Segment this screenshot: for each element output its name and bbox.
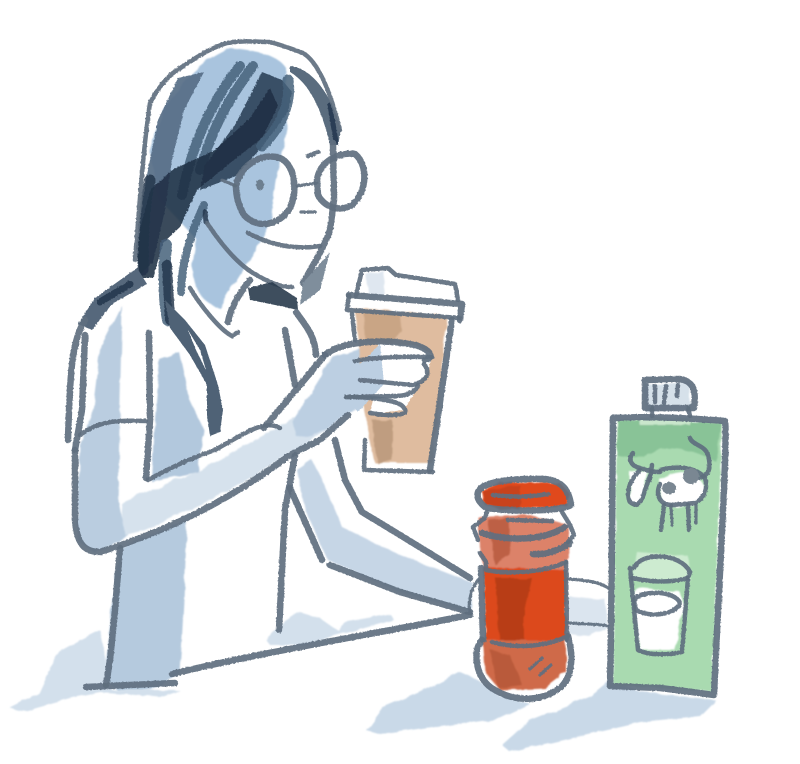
- smile: [248, 233, 320, 247]
- collar and bow tie: [190, 252, 330, 355]
- jar paint: [478, 482, 570, 690]
- hair dark mass: [136, 88, 278, 278]
- shoulder hair: [78, 268, 147, 330]
- jaw: [207, 223, 292, 287]
- jar: [473, 479, 574, 699]
- under arm torso wash: [152, 353, 204, 482]
- body washes: [77, 306, 473, 690]
- cup outline: [347, 268, 462, 472]
- sheep lines: [630, 453, 660, 472]
- jar outline: [473, 479, 574, 699]
- carton outline: [610, 379, 726, 695]
- hair strokes: [78, 66, 341, 436]
- coffee cup: [325, 268, 462, 472]
- lower lock: [165, 300, 223, 436]
- glass lines: [632, 556, 690, 581]
- hair and face wash: [150, 48, 287, 308]
- shirt and arm outlines: [68, 320, 470, 687]
- eye and nose: [256, 180, 264, 190]
- far arm wash: [297, 460, 473, 612]
- ground shadows: [10, 596, 716, 752]
- sheep body: [630, 470, 705, 507]
- hand wash: [293, 342, 384, 437]
- lower torso wash: [105, 520, 187, 690]
- far hand and arm behind jar: [469, 579, 608, 626]
- milk carton: [610, 379, 726, 695]
- milk glass: [633, 588, 684, 650]
- glasses bridge and temple: [297, 183, 317, 186]
- head outline and face: [135, 41, 364, 287]
- sleeve wash: [77, 306, 128, 553]
- hand with fingers over cup: [325, 342, 432, 415]
- arm wash: [120, 410, 350, 535]
- glasses right lens: [317, 154, 364, 208]
- carton paint: [613, 382, 722, 692]
- cup coffee fill: [353, 272, 447, 464]
- table edge: [172, 615, 470, 674]
- hair mid tone mass: [136, 72, 204, 275]
- right side hair: [290, 66, 341, 145]
- glasses left lens: [236, 157, 294, 224]
